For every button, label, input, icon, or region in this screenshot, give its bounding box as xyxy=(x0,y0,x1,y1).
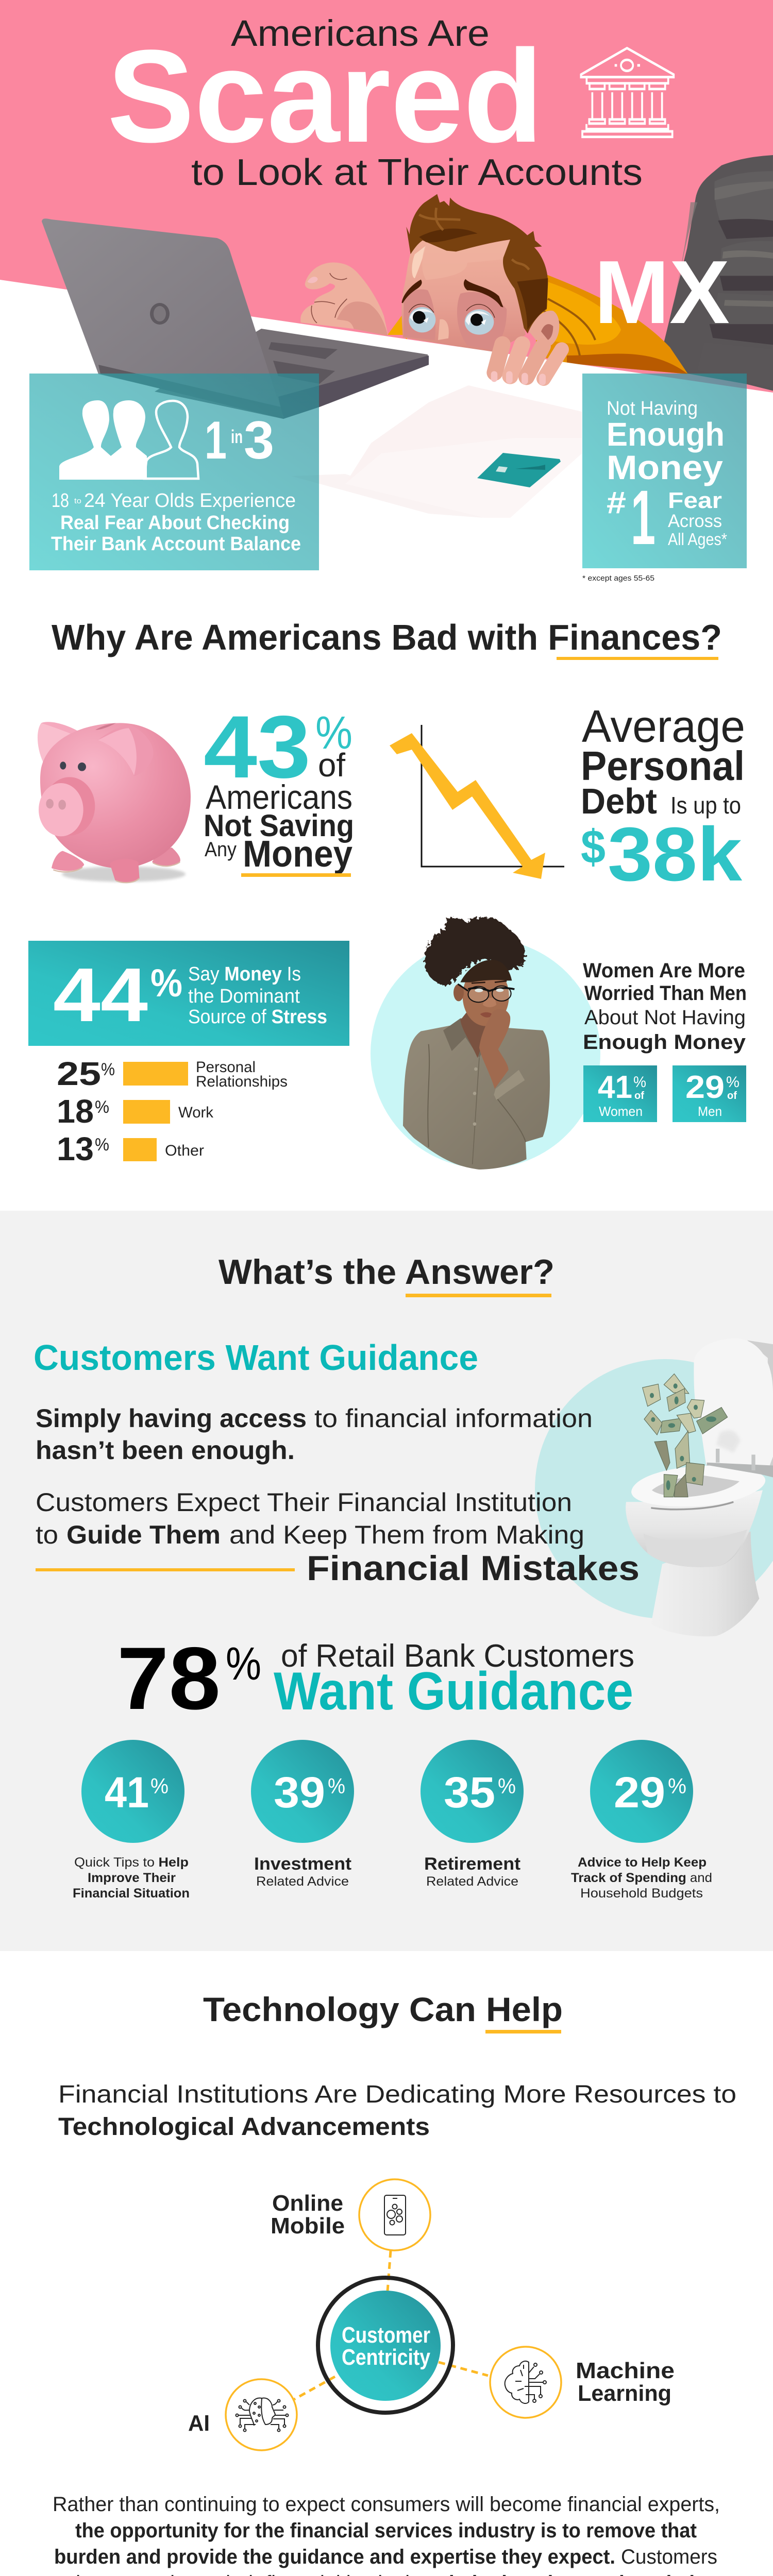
bar: personal relationships: 25 xyxy=(57,1055,101,1092)
text: women are more worried xyxy=(583,959,747,1054)
left hand xyxy=(300,262,388,336)
node: AI: AI xyxy=(188,2411,210,2436)
panel: number one fear xyxy=(582,374,747,568)
stat: average personal debt xyxy=(581,701,745,897)
panel: 1 in 3 fear: 18 xyxy=(52,490,69,512)
stat: average personal debt: Is up to xyxy=(670,792,741,819)
stat: 43 percent not saving: 43 xyxy=(204,698,311,796)
stat: 78 percent want guidance: % xyxy=(226,1638,261,1690)
stat: 43 percent not saving: of xyxy=(318,747,345,784)
panel: 44 percent stress xyxy=(28,941,349,1046)
money xyxy=(643,1374,728,1497)
stat card: women: 41 xyxy=(598,1070,632,1105)
glasses xyxy=(458,984,514,1002)
text: customers expect guidance: Financial Mistakes xyxy=(307,1549,640,1588)
lid xyxy=(747,1340,773,1477)
illustration: office chair xyxy=(664,155,773,391)
stat circle: 29 percent spending advice xyxy=(571,1740,712,1901)
stat circle: 41 percent quick tips: Financial Situation xyxy=(73,1886,190,1901)
seat xyxy=(631,1465,765,1506)
panel: 44 percent stress: % xyxy=(150,961,182,1005)
stat circle: 35 percent retirement: % xyxy=(498,1774,516,1798)
stat: average personal debt: $ xyxy=(581,821,606,873)
stat circle: 35 percent retirement: 35 xyxy=(444,1768,495,1817)
stat card: women: of xyxy=(634,1090,644,1101)
bar: personal relationships: % xyxy=(101,1060,115,1079)
bar: other xyxy=(57,1130,204,1167)
stat card: men: 29 xyxy=(685,1070,725,1105)
text: simply having access: hasn’t been enough. xyxy=(36,1436,295,1465)
stat circle: 29 percent spending advice: % xyxy=(668,1774,686,1798)
paragraph: conclusion: Customers xyxy=(621,2546,717,2568)
panel: number one fear: # xyxy=(607,485,626,520)
node: machine learning: Machine xyxy=(576,2358,675,2383)
icon: AI head xyxy=(236,2398,289,2432)
bar: work: % xyxy=(95,1097,109,1117)
desk surface xyxy=(0,280,773,598)
stat: 78 percent want guidance xyxy=(117,1629,634,1728)
panel: 1 in 3 fear: Their Bank Account Balance xyxy=(51,533,301,555)
hero background xyxy=(0,0,773,412)
diagram: customer centricity hub xyxy=(188,2179,675,2450)
hand xyxy=(479,1009,510,1089)
subheading: customers want guidance: Customers Want Guidance xyxy=(33,1337,478,1378)
panel: number one fear: Money xyxy=(607,448,723,486)
title: Scared xyxy=(107,23,543,170)
panel: number one fear: 1 xyxy=(631,474,656,561)
stat circle: 29 percent spending advice: Advice to Help Keep xyxy=(578,1855,707,1870)
text: women are more worried: Worried Than Men xyxy=(584,982,747,1005)
bar: other: Other xyxy=(165,1142,204,1159)
stat circle: 35 percent retirement: Related Advice xyxy=(426,1874,518,1889)
stat card: men: % xyxy=(726,1074,740,1091)
text: customers expect guidance: and Keep Them from Making xyxy=(229,1520,584,1549)
shirt xyxy=(403,1019,550,1170)
node: online mobile: Mobile xyxy=(271,2213,345,2239)
paragraph: conclusion: the opportunity for the financial services industry is to remove that xyxy=(75,2519,697,2542)
face xyxy=(401,240,526,352)
stat circle: 39 percent investment: Related Advice xyxy=(256,1874,349,1889)
icon: phone xyxy=(384,2195,406,2235)
panel: 44 percent stress: the Dominant xyxy=(188,986,300,1007)
bar: work: Work xyxy=(178,1104,214,1121)
illustration: toilet with money xyxy=(535,1338,773,1636)
text: customers expect guidance: Customers Expect Their Financial Institution xyxy=(36,1488,572,1517)
panel: number one fear: Fear xyxy=(668,488,722,513)
stat: 78 percent want guidance: of Retail Bank Customers xyxy=(281,1638,634,1674)
ear xyxy=(529,311,559,345)
stat: 43 percent not saving: Money xyxy=(243,834,352,875)
stat circle: 41 percent quick tips: Quick Tips to Help xyxy=(74,1855,189,1870)
bowl and base xyxy=(651,1532,759,1636)
heading: why are americans bad with finances: Why Are Americans Bad with Finances? xyxy=(52,617,722,657)
stat card: women: Women xyxy=(599,1104,643,1119)
node: machine learning xyxy=(490,2347,675,2418)
heading: what's the answer: What’s the Answer? xyxy=(219,1252,554,1292)
stat circle: 39 percent investment xyxy=(251,1740,354,1889)
stat: average personal debt: 38k xyxy=(608,812,743,897)
node: online mobile xyxy=(271,2179,430,2250)
connector lines xyxy=(294,2251,488,2399)
panel: 1 in 3 fear xyxy=(29,374,319,570)
hub circle xyxy=(330,2291,441,2401)
stat: 78 percent want guidance: Want Guidance xyxy=(274,1662,633,1721)
panel: 1 in 3 fear: in xyxy=(231,426,243,447)
stat: average personal debt: Personal xyxy=(581,743,745,789)
panel: 1 in 3 fear: 1 xyxy=(205,411,227,470)
panel: 44 percent stress: 44 xyxy=(53,953,148,1038)
stat circle: 29 percent spending advice: Track of Spending and xyxy=(571,1871,712,1885)
panel: 1 in 3 fear: Real Fear About Checking xyxy=(60,512,290,534)
illustration: laptop xyxy=(42,218,429,419)
text: financial institutions dedicating resources xyxy=(58,2081,736,2141)
stat: 78 percent want guidance: 78 xyxy=(117,1629,221,1728)
brows xyxy=(401,280,422,303)
panel: 44 percent stress: Say Money Is xyxy=(188,963,301,985)
stat card: women: % xyxy=(633,1074,646,1091)
stat circle: 35 percent retirement xyxy=(421,1740,524,1889)
illustration: man peeking over desk xyxy=(300,194,688,374)
heading: technology can help: Technology Can Help xyxy=(203,1990,563,2028)
panel: 44 percent stress: Source of Stress xyxy=(188,1006,327,1028)
bar: other: 13 xyxy=(57,1130,94,1167)
text: customers expect guidance: Guide Them xyxy=(66,1520,221,1549)
stat circle: 41 percent quick tips: Improve Their xyxy=(88,1871,176,1885)
title xyxy=(107,13,643,193)
paragraph: conclusion: burden and provide the guidance and expertise they expect. xyxy=(54,2546,615,2568)
node: online mobile: Online xyxy=(272,2191,343,2216)
hinge xyxy=(707,1463,773,1477)
stat: 43 percent not saving: Not Saving xyxy=(204,808,354,843)
text: women are more worried: Women Are More xyxy=(583,959,745,982)
face xyxy=(463,980,509,1026)
icon: bank building xyxy=(581,48,674,137)
bar: other: % xyxy=(95,1135,109,1155)
panel: number one fear: All Ages* xyxy=(668,530,727,549)
eyes xyxy=(409,307,435,332)
text: simply having access xyxy=(36,1404,593,1465)
text: financial institutions dedicating resources: Financial Institutions Are Dedicating More Resources to xyxy=(58,2081,736,2108)
stat card: men: Men xyxy=(698,1104,722,1119)
stat card: men: of xyxy=(727,1090,737,1101)
paragraph: conclusion: Rather than continuing to expect consumers will become financial experts, xyxy=(53,2493,720,2516)
hub circle: Centricity xyxy=(342,2345,430,2370)
illustration: piggy bank xyxy=(38,722,191,883)
hub ring xyxy=(318,2278,453,2413)
stat circle: 29 percent spending advice: 29 xyxy=(614,1768,665,1817)
stat: 43 percent not saving: % xyxy=(315,707,352,759)
footnote: * except ages 55-65 xyxy=(582,574,654,583)
stat circle: 35 percent retirement: Retirement xyxy=(424,1854,520,1874)
icon: three people xyxy=(59,400,198,480)
stat: 43 percent not saving: Americans xyxy=(206,778,352,816)
text: customers expect guidance: to xyxy=(36,1520,58,1549)
stat card: women xyxy=(583,1065,657,1122)
panel: number one fear: Enough xyxy=(607,416,725,453)
stat: 43 percent not saving: Any xyxy=(205,838,237,861)
sweater xyxy=(388,270,688,374)
stat circle: 41 percent quick tips: % xyxy=(150,1774,169,1798)
hair xyxy=(406,194,548,333)
illustration: worried woman in circle xyxy=(371,917,600,1170)
panel: 1 in 3 fear: 24 Year Olds Experience xyxy=(84,490,296,512)
panel: 1 in 3 fear: to xyxy=(74,497,81,505)
stat circle: 39 percent investment: Investment xyxy=(254,1854,351,1874)
stat circle: 39 percent investment: % xyxy=(328,1774,345,1798)
panel: answer background xyxy=(0,1211,773,1951)
node: AI xyxy=(188,2379,297,2450)
text: financial institutions dedicating resources: Technological Advancements xyxy=(58,2113,430,2141)
stat circle: 39 percent investment: 39 xyxy=(274,1768,325,1817)
text: women are more worried: Enough Money xyxy=(583,1031,746,1054)
title: to Look at Their Accounts xyxy=(191,152,643,193)
panel: number one fear: Not Having xyxy=(607,398,698,419)
paragraph: conclusion xyxy=(53,2493,720,2576)
illustration: bank card xyxy=(477,453,561,487)
bar: personal relationships xyxy=(57,1055,288,1092)
bar chart: sources of stress xyxy=(57,1055,288,1167)
hair xyxy=(424,917,525,986)
stat circle: 29 percent spending advice: Household Budgets xyxy=(580,1886,703,1901)
stat: 43 percent not saving xyxy=(204,698,354,877)
bar: personal relationships: Relationships xyxy=(196,1073,288,1090)
bar: work xyxy=(57,1093,214,1130)
text: simply having access: Simply having access xyxy=(36,1404,307,1433)
panel: 1 in 3 fear: 3 xyxy=(244,411,274,470)
stat card: men xyxy=(673,1065,746,1122)
text: simply having access: to financial information xyxy=(314,1404,593,1433)
stat circle: 41 percent quick tips: 41 xyxy=(105,1768,149,1817)
logo: MX: MX xyxy=(594,242,730,342)
text: women are more worried: About Not Having xyxy=(584,1006,746,1029)
bar: work: 18 xyxy=(57,1093,94,1130)
bar: personal relationships: Personal xyxy=(196,1059,256,1076)
stat: average personal debt: Average xyxy=(582,701,745,752)
chart: falling arrow xyxy=(390,725,564,879)
illustration: hand on desk xyxy=(494,344,562,382)
text: customers expect guidance xyxy=(36,1488,640,1588)
stat circle: 41 percent quick tips xyxy=(73,1740,190,1901)
icon: brain circuit xyxy=(505,2361,546,2403)
title: Americans Are xyxy=(231,13,490,54)
panel: number one fear: Across xyxy=(668,511,722,531)
node: machine learning: Learning xyxy=(578,2381,671,2406)
illustration: papers xyxy=(291,385,582,518)
hub circle: Customer xyxy=(342,2323,430,2348)
stat: average personal debt: Debt xyxy=(581,781,657,821)
